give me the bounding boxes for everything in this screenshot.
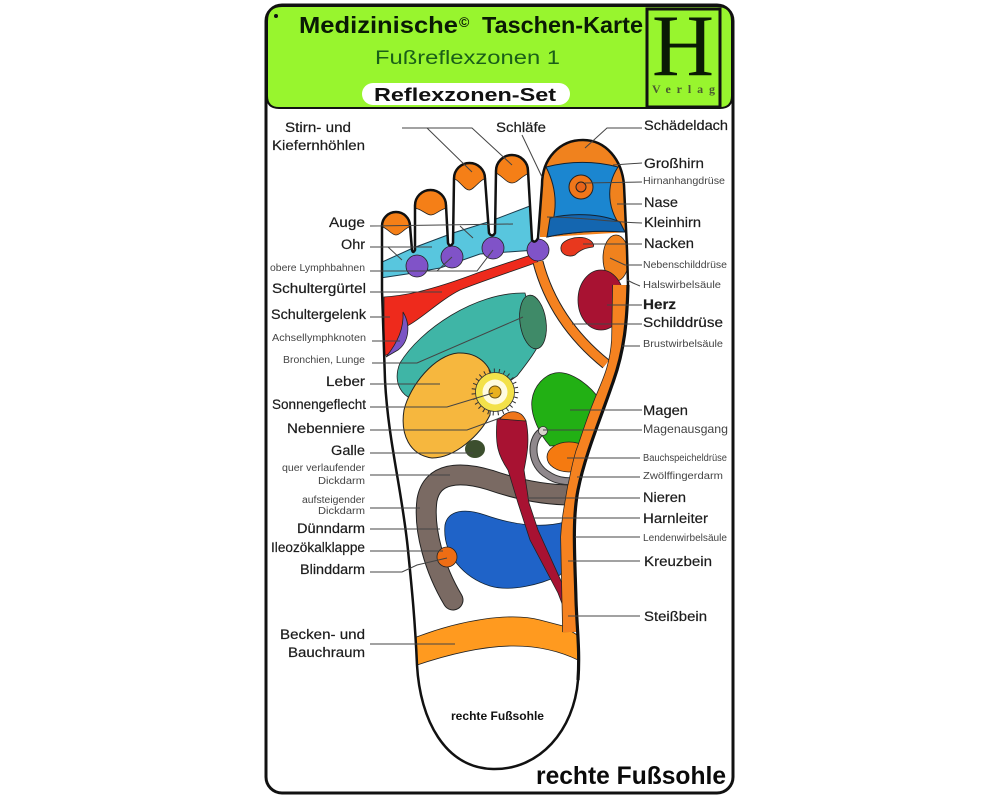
labels: right side: Nase xyxy=(644,195,678,210)
zone: shoulder girdle xyxy=(384,254,538,356)
zone: pituitary xyxy=(569,175,593,199)
labels: left side: Bauchraum xyxy=(288,645,365,660)
labels: left side: quer verlaufender xyxy=(282,463,366,474)
zone: pancreas xyxy=(546,442,578,472)
leader lines xyxy=(370,128,642,644)
labels: left side: Becken- und xyxy=(280,627,365,642)
labels: right side: Brustwirbelsäule xyxy=(643,339,723,350)
labels: right side: Nebenschilddrüse xyxy=(643,260,727,271)
zone: upper lymph band xyxy=(380,206,536,278)
labels: right side: Steißbein xyxy=(644,609,707,624)
title: © xyxy=(459,14,470,30)
zone: lymph nodes xyxy=(406,237,549,277)
subtitle: Fußreflexzonen 1 xyxy=(375,47,560,69)
zone: big toe brain blue xyxy=(546,162,625,237)
zone: kidney and ureter xyxy=(496,417,562,604)
card outline xyxy=(266,5,733,793)
labels: left side: Galle xyxy=(331,443,365,458)
zone: neck xyxy=(561,237,594,256)
labels: right side: Schädeldach xyxy=(644,118,728,133)
sole caption: rechte Fußsohle xyxy=(451,711,544,723)
labels: left side: Achsellymphknoten xyxy=(272,333,366,344)
zone: colon xyxy=(426,475,572,600)
labels: left side: Leber xyxy=(326,374,366,389)
labels: right side: Kleinhirn xyxy=(644,215,701,230)
set pill: Reflexzonen-Set xyxy=(374,85,556,105)
labels: right side: Magenausgang xyxy=(643,422,728,436)
title: Medizinische xyxy=(299,12,458,38)
foot diagram xyxy=(380,135,630,769)
zone: adrenal xyxy=(500,412,526,421)
zone: stomach xyxy=(532,373,600,446)
labels: left side: Schultergürtel xyxy=(272,281,366,296)
labels: right side: Schilddrüse xyxy=(643,315,723,330)
set pill xyxy=(362,83,570,105)
labels: left side xyxy=(270,120,546,660)
labels: left side: Ohr xyxy=(341,237,366,252)
zone: spine xyxy=(568,285,620,632)
labels: right side: Herz xyxy=(643,297,676,312)
zone: armpit lymph xyxy=(386,312,408,357)
zone: big toe orange xyxy=(540,141,625,237)
labels: left side: Dünndarm xyxy=(297,521,365,536)
zone: toe caps xyxy=(383,156,527,236)
labels: left side: Sonnengeflecht xyxy=(272,397,366,412)
labels: left side: Bronchien, Lunge xyxy=(283,355,365,366)
labels: right side: Großhirn xyxy=(644,156,704,171)
zone: lung xyxy=(397,293,538,397)
labels: left side: Auge xyxy=(329,215,365,230)
footer caption: rechte Fußsohle xyxy=(536,762,726,790)
zone: parathyroid xyxy=(603,235,629,281)
zone: gallbladder xyxy=(465,440,485,458)
labels: right side: Harnleiter xyxy=(643,511,709,526)
title xyxy=(299,12,643,38)
labels: right side xyxy=(643,118,728,624)
labels: left side: Ileozökalklappe xyxy=(271,540,365,555)
zone: thyroid band xyxy=(538,262,606,364)
labels: left side: Stirn- und xyxy=(285,120,351,135)
labels: right side: Bauchspeicheldrüse xyxy=(643,453,727,464)
publisher logo: H xyxy=(652,0,714,95)
zone: pelvis xyxy=(414,617,582,666)
labels: left side: Blinddarm xyxy=(300,562,365,577)
labels: left side: Schläfe xyxy=(496,120,546,135)
zone: heart xyxy=(578,270,624,330)
zone: bronchi xyxy=(519,294,547,350)
zone: small intestine xyxy=(445,511,568,588)
publisher logo: Verlag xyxy=(652,82,715,96)
labels: left side: Dickdarm xyxy=(318,476,365,487)
labels: right side: Magen xyxy=(643,403,688,418)
labels: left side: Dickdarm xyxy=(318,506,365,517)
labels: right side: Nacken xyxy=(644,236,694,251)
zone: liver xyxy=(403,353,492,458)
labels: left side: Nebenniere xyxy=(287,421,365,436)
labels: right side: Lendenwirbelsäule xyxy=(643,533,727,544)
labels: right side: Hirnanhangdrüse xyxy=(643,176,725,187)
labels: left side: Kiefernhöhlen xyxy=(272,138,365,153)
labels: right side: Zwölffingerdarm xyxy=(643,471,723,482)
labels: left side: obere Lymphbahnen xyxy=(270,263,365,274)
zone: duodenum xyxy=(533,426,574,481)
labels: right side: Nieren xyxy=(643,490,686,505)
zone: solar plexus xyxy=(474,370,516,414)
reflexology card infographic xyxy=(264,4,734,794)
labels: left side: aufsteigender xyxy=(302,495,366,506)
header banner xyxy=(267,0,732,108)
title: Taschen-Karte xyxy=(482,12,643,38)
labels: right side: Kreuzbein xyxy=(644,554,712,569)
labels: right side: Halswirbelsäule xyxy=(643,280,721,291)
labels: left side: Schultergelenk xyxy=(271,307,366,322)
zone: ileocecal valve xyxy=(437,547,457,567)
